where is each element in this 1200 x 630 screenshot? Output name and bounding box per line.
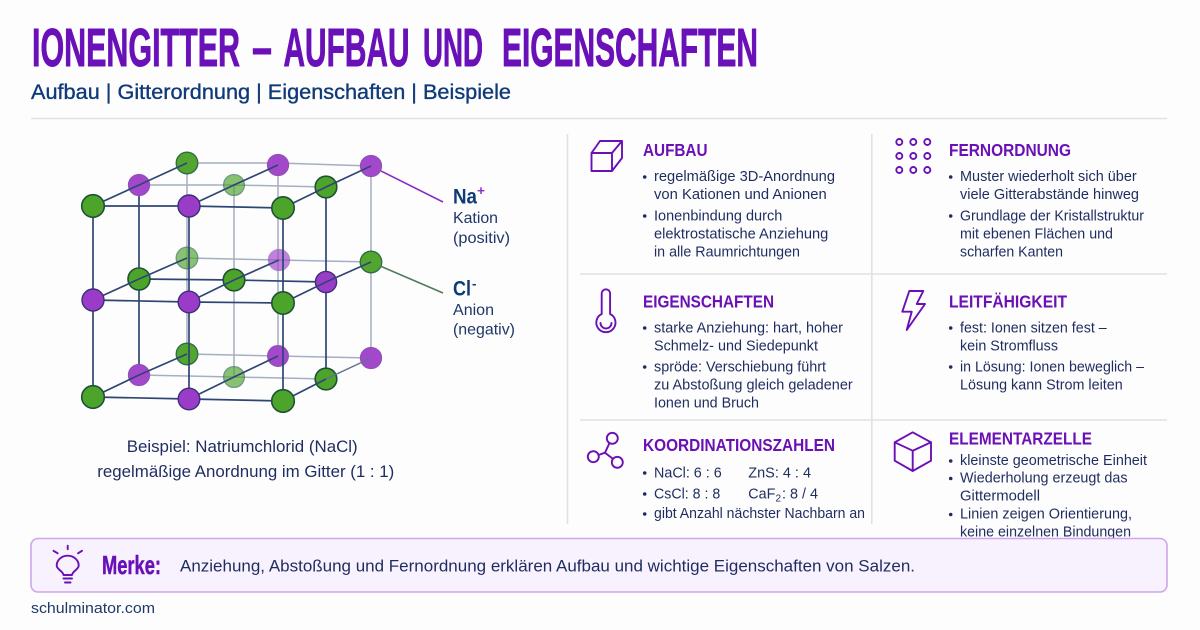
subtitle: Aufbau | Gitterordnung | Eigenschaften | Beispiele [31, 81, 511, 104]
panel: Aufbau: von Kationen und Anionen [654, 186, 827, 203]
panel: Fernordnung: scharfen Kanten [960, 244, 1063, 260]
panel: Fernordnung [896, 139, 1144, 260]
title: AUFBAU [284, 19, 410, 78]
icon: cube outline [592, 141, 622, 171]
panel: Fernordnung: Muster wiederholt sich über [960, 168, 1137, 185]
footer: source: schulminator.com [31, 600, 155, 617]
panel: Leitfähigkeit [902, 291, 1145, 393]
panel: Koordinationszahlen: gibt Anzahl nächster Nachbarn an [654, 505, 865, 522]
label: Cl- anion [453, 276, 515, 338]
panel: Elementarzelle: kleinste geometrische Einheit [960, 452, 1148, 469]
callout: Merke: Merke: [102, 550, 161, 580]
panel: Aufbau: in alle Raumrichtungen [654, 244, 800, 260]
panel: Fernordnung: mit ebenen Flächen und [960, 226, 1113, 242]
callout: Merke [31, 538, 1167, 592]
caption: example sodium chloride [97, 437, 394, 481]
icon: light bulb [54, 546, 82, 582]
title [32, 19, 758, 78]
panel: Eigenschaften: zu Abstoßung gleich geladener [654, 376, 853, 393]
label: Na+ cation [453, 183, 510, 247]
panel: Elementarzelle: keine einzelnen Bindungen [960, 524, 1131, 541]
panel: Leitfähigkeit: LEITFÄHIGKEIT [949, 292, 1067, 312]
panel: Koordinationszahlen: ZnS: 4 : 4 [748, 464, 811, 481]
label: Cl- anion: (negativ) [453, 322, 515, 338]
panel: Leitfähigkeit: fest: Ionen sitzen fest – [960, 319, 1107, 336]
panel: Eigenschaften: EIGENSCHAFTEN [643, 292, 774, 312]
icon: isometric cube [895, 432, 931, 471]
panel: Leitfähigkeit: in Lösung: Ionen beweglich – [960, 358, 1145, 376]
panel: Eigenschaften: Ionen und Bruch [654, 394, 759, 412]
panel: Koordinationszahlen: CaF [748, 485, 775, 502]
panel: Aufbau [592, 140, 835, 260]
panel: Aufbau: AUFBAU [643, 140, 708, 160]
icon: molecule [598, 443, 612, 458]
panel: Aufbau: elektrostatische Anziehung [654, 226, 828, 242]
icon: dot grid [896, 139, 930, 173]
panel: Koordinationszahlen: 2 [776, 494, 782, 504]
title: UND [423, 19, 483, 78]
panel: Fernordnung: FERNORDNUNG [949, 140, 1071, 160]
panel: Koordinationszahlen: KOORDINATIONSZAHLEN [643, 435, 835, 455]
panel: Aufbau: Ionenbindung durch [654, 208, 782, 224]
panel: Leitfähigkeit: kein Stromfluss [960, 338, 1058, 354]
label: Na+ cation: (positiv) [453, 230, 510, 247]
panel: Elementarzelle: ELEMENTARZELLE [949, 428, 1092, 448]
label: Na+ cation: + [477, 183, 485, 198]
arrow: Na+ leader line [381, 171, 443, 202]
arrow: Cl- leader line [380, 266, 443, 293]
panel: Eigenschaften: spröde: Verschiebung führt [654, 358, 827, 376]
icon: lightning bolt [902, 291, 925, 330]
panel: Fernordnung: Grundlage der Kristallstruktur [960, 208, 1144, 224]
panel: Fernordnung: viele Gitterabstände hinweg [960, 186, 1139, 203]
panel: Eigenschaften: starke Anziehung: hart, hoher [654, 319, 843, 336]
panel: Eigenschaften [596, 289, 853, 412]
panel: Elementarzelle [895, 428, 1148, 541]
label: Cl- anion: Anion [453, 302, 494, 319]
panel: Koordinationszahlen [588, 433, 865, 522]
panel: Koordinationszahlen: CsCl: 8 : 8 [654, 485, 720, 502]
title: EIGENSCHAFTEN [502, 19, 758, 78]
label: Cl- anion: - [472, 276, 476, 291]
panel: Elementarzelle: Linien zeigen Orientierung, [960, 506, 1132, 523]
icon: thermometer [596, 289, 616, 332]
label: Na+ cation: Na [453, 186, 477, 208]
panel: Elementarzelle: Wiederholung erzeugt das [960, 470, 1128, 487]
caption: example sodium chloride: Beispiel: Natriumchlorid (NaCl) [127, 437, 358, 456]
label: Na+ cation: Kation [453, 210, 498, 227]
label: Cl- anion: Cl [453, 278, 471, 300]
caption: example sodium chloride: regelmäßige Anordnung im Gitter (1 : 1) [97, 462, 394, 481]
panel: Koordinationszahlen: : 8 / 4 [782, 485, 818, 502]
panel: Aufbau: regelmäßige 3D-Anordnung [654, 168, 835, 185]
panel: Leitfähigkeit: Lösung kann Strom leiten [960, 376, 1123, 393]
panel: Elementarzelle: Gittermodell [960, 488, 1040, 505]
title: – [252, 19, 272, 78]
title: IONENGITTER [32, 19, 240, 78]
callout: Merke: Anziehung, Abstoßung und Fernordnung erklären Aufbau und wichtige Eigenschaften von Salzen. [180, 556, 915, 576]
panel: Koordinationszahlen: NaCl: 6 : 6 [654, 464, 722, 481]
lattice diagram: NaCl crystal [82, 152, 382, 412]
panel: Eigenschaften: Schmelz- und Siedepunkt [654, 338, 819, 354]
